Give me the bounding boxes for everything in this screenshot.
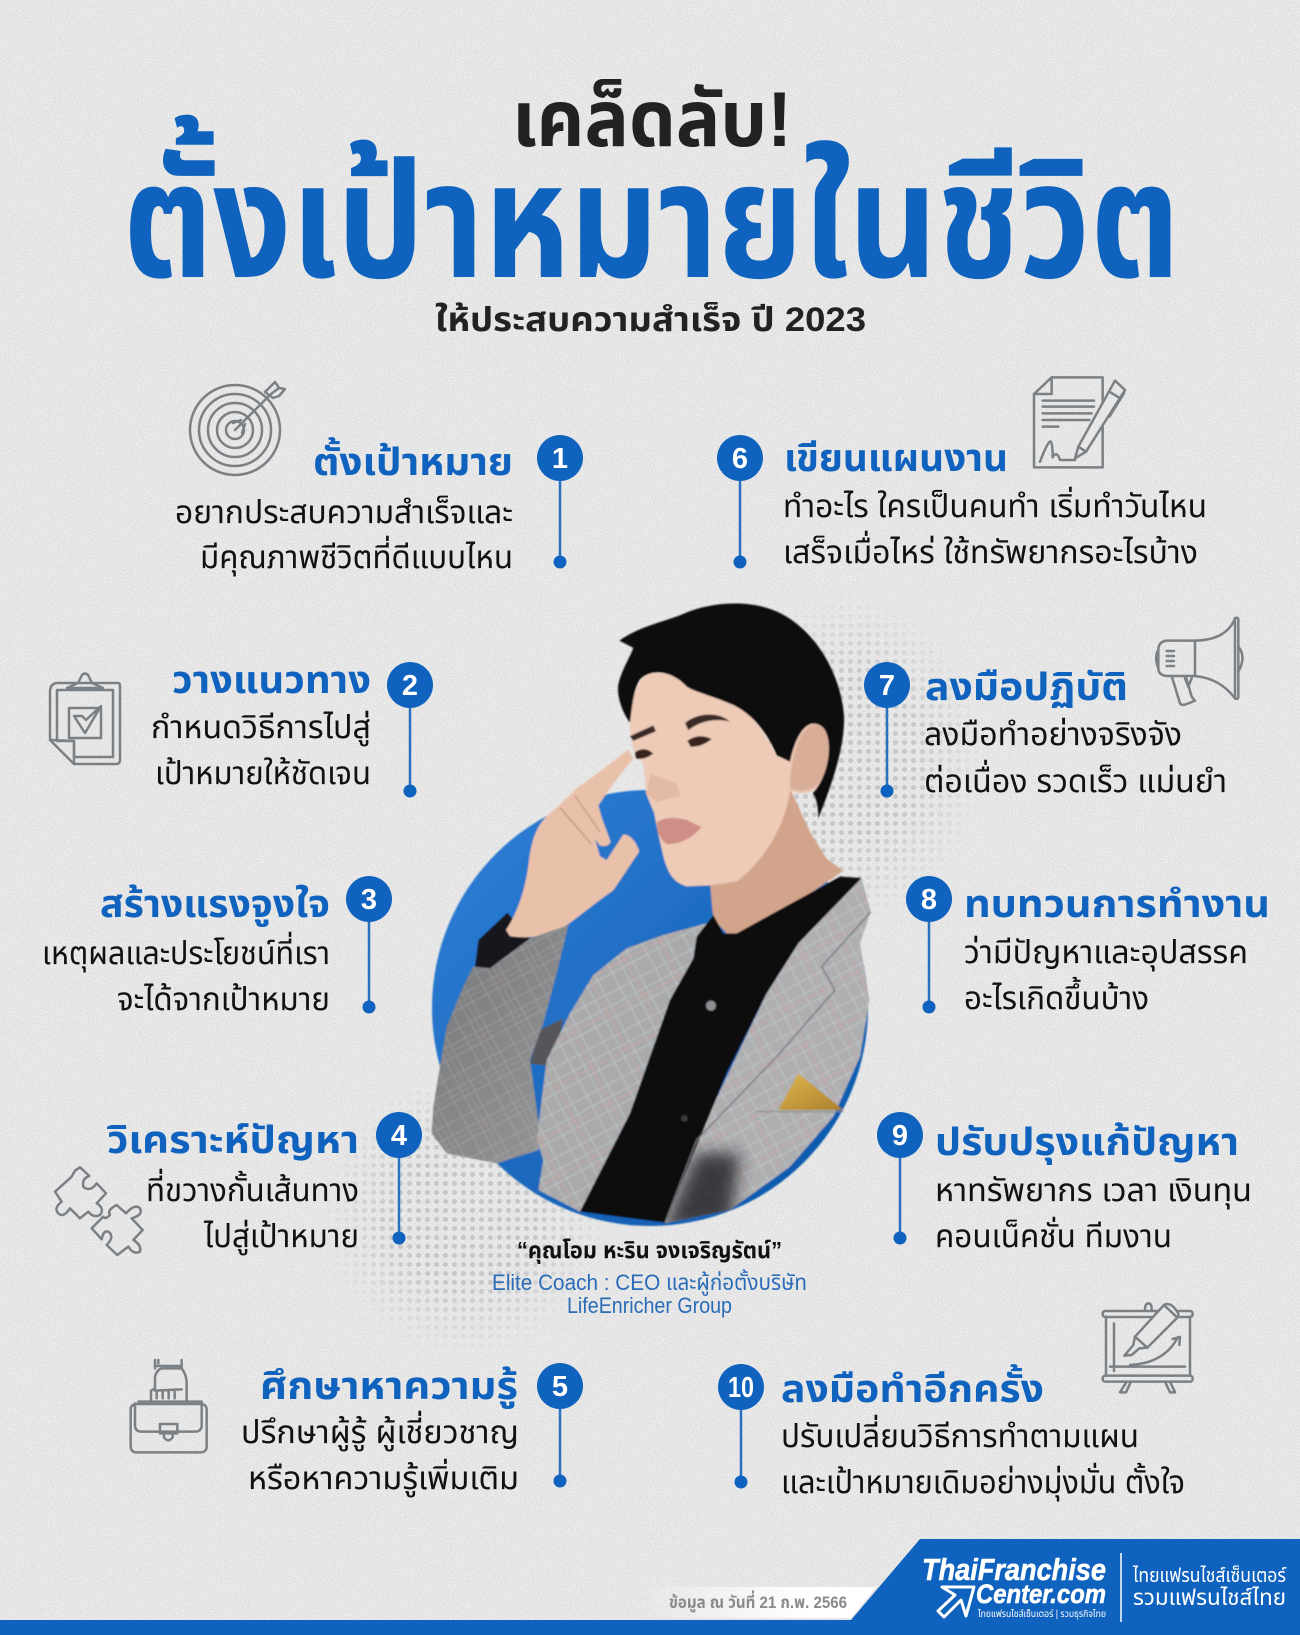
jacket and shirt — [432, 877, 871, 1230]
body 9: หาทรัพยากร เวลา เงินทุน — [935, 1172, 1252, 1209]
footer — [0, 1539, 1300, 1635]
body 8 — [964, 934, 1248, 1016]
blue circle — [432, 790, 868, 1226]
jacket right front — [665, 878, 871, 1223]
body 2: เป้าหมายให้ชัดเจน — [155, 755, 371, 791]
marker 7: 7 — [879, 670, 895, 702]
body 8: ว่ามีปัญหาและอุปสรรค — [964, 934, 1248, 971]
logo arrow — [938, 1587, 974, 1617]
body 9 — [935, 1172, 1252, 1254]
hand — [506, 750, 639, 937]
halftone dots lower left — [336, 1094, 592, 1339]
logo — [922, 1552, 1106, 1620]
icon: target — [190, 382, 285, 475]
item 10 — [718, 1363, 1185, 1501]
brand tagline: รวมแฟรนไชส์ไทย — [1133, 1585, 1286, 1610]
body 6: เสร็จเมื่อไหร่ ใช้ทรัพยากรอะไรบ้าง — [783, 530, 1198, 570]
marker 3: 3 — [361, 884, 377, 916]
item 4 — [106, 1112, 422, 1256]
heading 8: ทบทวนการทำงาน — [964, 884, 1270, 926]
body 10 — [781, 1414, 1185, 1501]
body 6: ทำอะไร ใครเป็นคนทำ เริ่มทำวันไหน — [783, 486, 1207, 524]
body 1: อยากประสบความสำเร็จและ — [175, 494, 513, 530]
marker 4 — [376, 1112, 422, 1244]
body 5 — [241, 1410, 519, 1498]
portrait — [432, 604, 871, 1230]
body 7: ต่อเนื่อง รวดเร็ว แม่นยำ — [924, 759, 1227, 799]
cuff — [475, 913, 530, 968]
finger lines — [560, 796, 600, 844]
underarm shadow — [530, 1018, 563, 1067]
marker 5 — [537, 1363, 583, 1488]
marker 10 — [718, 1364, 764, 1488]
item 1 — [175, 435, 583, 576]
heading 6: เขียนแผนงาน — [784, 438, 1008, 480]
brand tagline — [1132, 1565, 1287, 1610]
marker 1 — [537, 435, 583, 568]
body 2: กำหนดวิธีการไปสู่ — [151, 709, 371, 747]
lapel edge — [665, 912, 871, 1223]
icon: hand with briefcase — [131, 1360, 207, 1452]
ear — [790, 724, 829, 791]
heading 4: วิเคราะห์ปัญหา — [106, 1120, 359, 1162]
icon: document and pen — [1034, 377, 1125, 467]
halftone dots upper right — [768, 614, 970, 906]
nose shadow — [646, 774, 680, 802]
item 6 — [717, 435, 1207, 570]
marker 9 — [877, 1112, 923, 1244]
marker 1: 1 — [552, 443, 568, 475]
heading 10: ลงมือทำอีกครั้ง — [781, 1363, 1044, 1411]
marker 10: 10 — [728, 1372, 754, 1404]
body 2 — [151, 709, 371, 791]
logo line 2: Center.com — [976, 1579, 1106, 1609]
body 4 — [146, 1168, 359, 1256]
body 1: มีคุณภาพชีวิตที่ดีแบบไหน — [200, 535, 513, 576]
body 3: จะได้จากเป้าหมาย — [117, 981, 330, 1017]
body 3 — [42, 931, 330, 1017]
body 7 — [924, 716, 1227, 799]
pocket square — [778, 1073, 843, 1110]
body 4: ที่ขวางกั้นเส้นทาง — [146, 1168, 359, 1208]
date: ข้อมูล ณ วันที่ 21 ก.พ. 2566 — [669, 1590, 847, 1613]
marker 8: 8 — [921, 884, 937, 916]
heading 9: ปรับปรุงแก้ปัญหา — [935, 1122, 1239, 1165]
hair — [618, 604, 844, 818]
marker 2: 2 — [402, 670, 418, 702]
jacket left front — [537, 922, 713, 1212]
icon: presentation board — [1103, 1303, 1193, 1392]
body 4: ไปสู่เป้าหมาย — [203, 1218, 359, 1256]
item 9 — [877, 1112, 1252, 1254]
icon: megaphone — [1156, 618, 1242, 705]
body 7: ลงมือทำอย่างจริงจัง — [924, 716, 1182, 752]
marker 9: 9 — [892, 1120, 908, 1152]
item 7 — [864, 662, 1227, 799]
heading 3: สร้างแรงจูงใจ — [100, 884, 330, 927]
body 3: เหตุผลและประโยชน์ที่เรา — [42, 931, 330, 972]
sleeve — [432, 925, 568, 1163]
marker 4: 4 — [391, 1120, 407, 1152]
heading 5: ศึกษาหาความรู้ — [260, 1366, 518, 1409]
body 5: หรือหาความรู้เพิ่มเติม — [248, 1458, 519, 1498]
item 8 — [906, 876, 1270, 1016]
neck — [670, 788, 843, 944]
icon: puzzle pieces — [55, 1167, 143, 1255]
item 5 — [241, 1363, 583, 1498]
name: “คุณโอม หะริน จงเจริญรัตน์” — [517, 1237, 782, 1264]
eyes — [635, 736, 712, 759]
lips — [657, 818, 702, 844]
jacket shadow — [663, 1153, 740, 1230]
title line 1: เคล็ดลับ! — [512, 75, 792, 163]
marker 6 — [717, 435, 763, 568]
body 10: และเป้าหมายเดิมอย่างมุ่งมั่น ตั้งใจ — [781, 1462, 1185, 1501]
date strip — [640, 1587, 876, 1618]
subtitle: ให้ประสบความสำเร็จ ปี 2023 — [435, 301, 866, 339]
item 3 — [42, 876, 392, 1017]
pocket line — [755, 1110, 843, 1113]
icon: clipboard — [50, 674, 120, 764]
item 2 — [151, 660, 433, 798]
role line 2: LifeEnricher Group — [567, 1293, 732, 1318]
marker 3 — [346, 876, 392, 1014]
body 8: อะไรเกิดขึ้นบ้าง — [964, 976, 1149, 1016]
role line 1: Elite Coach : CEO และผู้ก่อตั้งบริษัท — [492, 1268, 807, 1296]
shirt buttons — [681, 1001, 716, 1122]
heading 7: ลงมือปฏิบัติ — [925, 667, 1128, 709]
body 9: คอนเน็คชั่น ทีมงาน — [935, 1216, 1172, 1254]
marker 2 — [387, 662, 433, 798]
heading 2: วางแนวทาง — [172, 660, 371, 702]
marker 7 — [864, 662, 910, 798]
face — [630, 673, 829, 886]
shirt — [580, 877, 862, 1223]
logo line 1: ThaiFranchise — [922, 1552, 1106, 1587]
logo tagline: ไทยแฟรนไชส์เซ็นเตอร์ | รวมธุรกิจไทย — [977, 1607, 1106, 1620]
heading 1: ตั้งเป้าหมาย — [313, 436, 513, 484]
blue band — [0, 1539, 1300, 1635]
caption — [492, 1237, 807, 1318]
marker 8 — [906, 876, 952, 1014]
title — [123, 75, 1180, 339]
body 1 — [175, 494, 513, 576]
body 10: ปรับเปลี่ยนวิธีการทำตามแผน — [781, 1414, 1139, 1454]
body 5: ปรึกษาผู้รู้ ผู้เชี่ยวชาญ — [241, 1410, 519, 1452]
marker 6: 6 — [732, 443, 748, 475]
marker 5: 5 — [552, 1371, 568, 1403]
body 6 — [783, 486, 1207, 570]
eyebrows — [630, 715, 730, 741]
